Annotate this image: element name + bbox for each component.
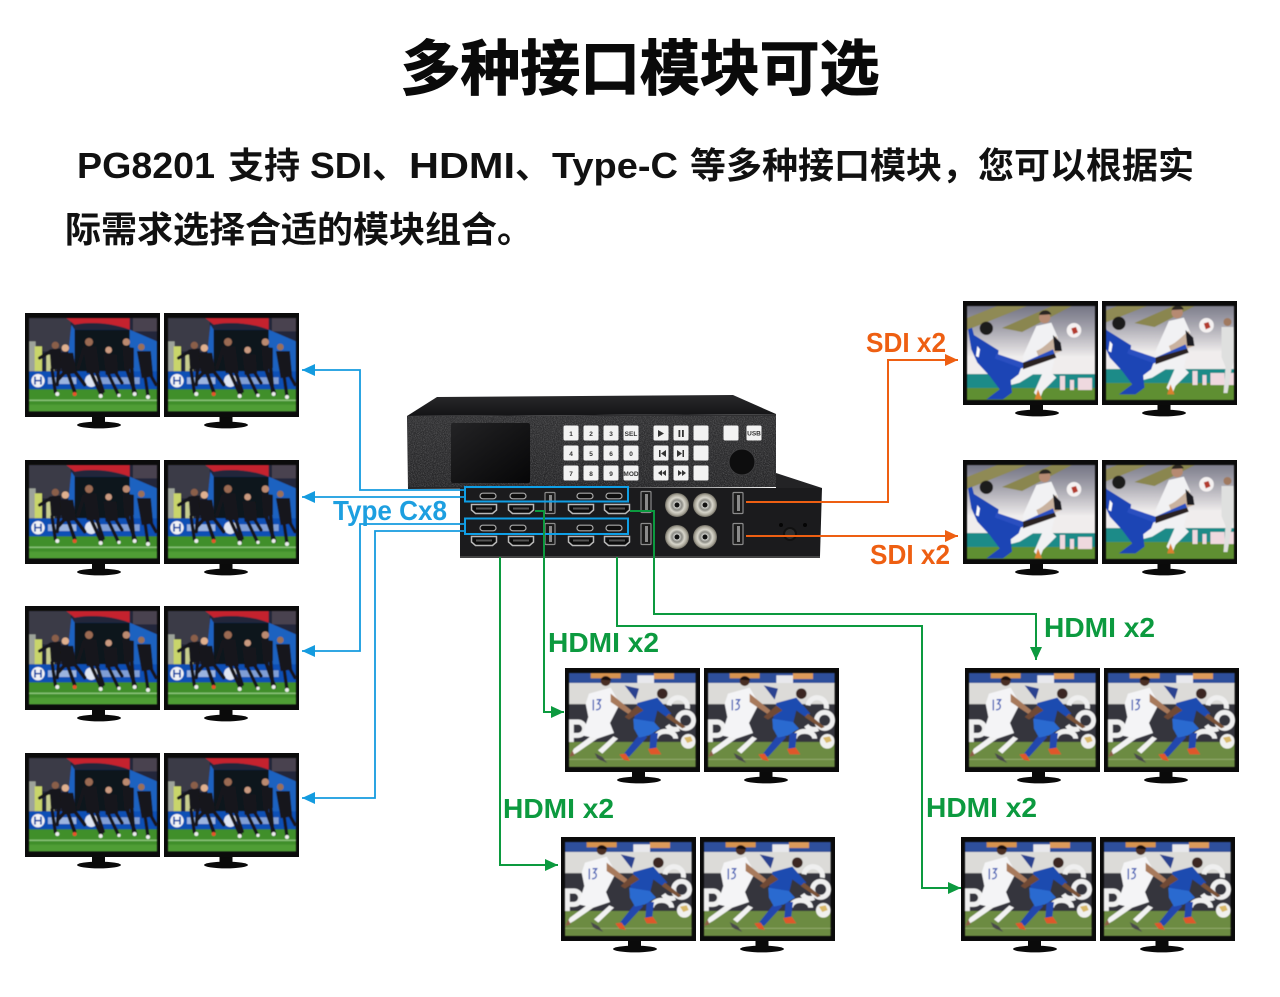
label: HDMI x2 centre upper: HDMI x2 (548, 627, 659, 658)
number keypad: 2 (589, 431, 593, 438)
label: SDI x2 upper: SDI x2 (866, 327, 946, 358)
label: HDMI x2 centre lower: HDMI x2 (503, 793, 614, 824)
Type-C highlight boxes (465, 487, 628, 534)
device top unit (407, 395, 776, 489)
arrows: Type-C outputs (302, 370, 465, 798)
number keypad (564, 426, 639, 480)
monitor pair: HDMI centre upper (565, 668, 839, 783)
description text: 、 (515, 145, 551, 186)
number keypad: 8 (589, 471, 593, 478)
description text: 支持 (228, 145, 300, 186)
title: 多种接口模块可选 (400, 36, 880, 103)
connector ports (472, 492, 807, 549)
device: video processor (407, 395, 822, 558)
description text: HDMI (409, 145, 515, 186)
number keypad: 9 (609, 471, 613, 478)
monitor pair: left row 3 (25, 606, 299, 721)
monitor pair: HDMI right upper (965, 668, 1239, 783)
number keypad: MOD (623, 471, 639, 478)
number keypad: 3 (609, 431, 613, 438)
description text: PG8201 (77, 145, 215, 186)
USB button and knob (724, 426, 762, 475)
monitor pair: left row 2 (25, 460, 299, 575)
monitor pair: left row 1 (25, 313, 299, 428)
arrows: HDMI outputs (500, 511, 1036, 888)
label: HDMI x2 right upper: HDMI x2 (1044, 612, 1155, 643)
number keypad: 0 (629, 451, 633, 458)
description text (65, 145, 1194, 250)
monitor pair: HDMI right lower (961, 837, 1235, 952)
label: HDMI x2 right lower: HDMI x2 (926, 792, 1037, 823)
description text: 等多种接口模块，您可以根据实 (690, 145, 1194, 186)
number keypad: 6 (609, 451, 613, 458)
label: SDI x2 lower: SDI x2 (870, 539, 950, 570)
description text: 际需求选择合适的模块组合。 (65, 209, 533, 250)
USB button and knob: USB (747, 430, 761, 438)
label: Type Cx8: Type Cx8 (333, 495, 447, 526)
monitor pair: HDMI centre lower (561, 837, 835, 952)
monitor pair: SDI upper (947, 281, 1270, 416)
monitor pair: left row 4 (25, 753, 299, 868)
number keypad: 7 (569, 471, 573, 478)
description text: Type-C (552, 145, 678, 186)
arrows: SDI outputs (746, 360, 958, 536)
playback keys (654, 426, 708, 480)
device rear chassis (460, 473, 822, 558)
number keypad: 4 (569, 451, 573, 458)
number keypad: 5 (589, 451, 593, 458)
monitor pair: SDI lower (947, 440, 1270, 575)
number keypad: SEL (625, 431, 637, 438)
description text: SDI (310, 145, 372, 186)
description text: 、 (372, 145, 408, 186)
number keypad: 1 (569, 431, 573, 438)
